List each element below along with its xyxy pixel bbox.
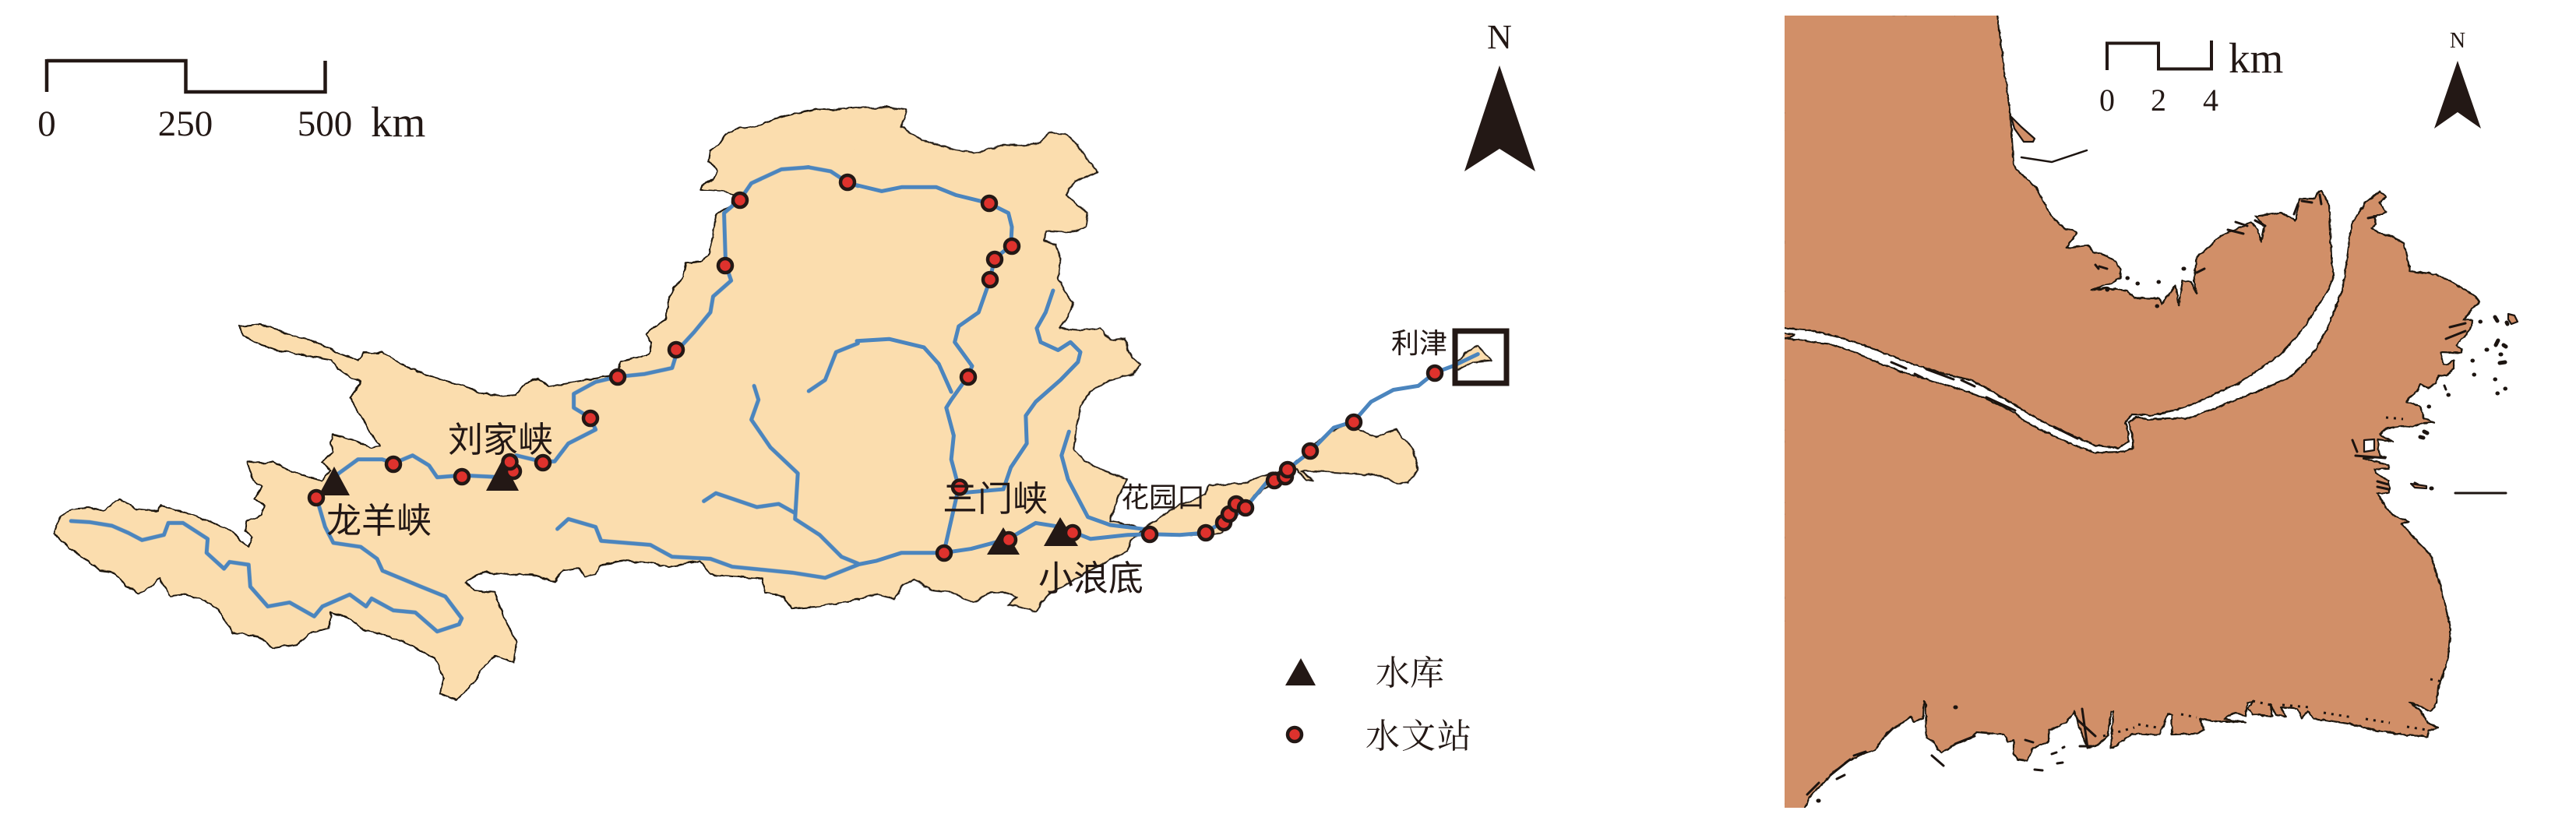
north arrow: delta map: N bbox=[2450, 29, 2465, 53]
scale bar: delta map bbox=[2099, 34, 2283, 118]
label: Longyangxia: 龙羊峡 bbox=[326, 501, 432, 541]
rivers bbox=[71, 167, 1478, 632]
scale bar: delta map: 0 bbox=[2099, 83, 2115, 118]
label: Xiaolangdi: 小浪底 bbox=[1038, 558, 1144, 598]
panel: Yellow River delta map bbox=[1783, 14, 2518, 809]
scale bar: delta map: 4 bbox=[2203, 83, 2218, 118]
label: Sanmenxia: 三门峡 bbox=[943, 479, 1048, 519]
reservoir markers bbox=[319, 460, 1078, 555]
scale bar: basin map: km bbox=[371, 98, 425, 146]
inset locator box bbox=[1455, 331, 1506, 383]
panel: Yellow River basin map bbox=[37, 18, 1535, 756]
scale bar: basin map bbox=[37, 59, 425, 146]
scale bar: delta map: 2 bbox=[2151, 83, 2166, 118]
legend bbox=[1285, 654, 1473, 756]
hydrological stations bbox=[309, 175, 1442, 560]
north arrow: basin map: N bbox=[1487, 18, 1512, 56]
label: Huayuankou: 花园口 bbox=[1121, 481, 1205, 513]
basin outline bbox=[55, 107, 1491, 699]
north arrow: basin map bbox=[1464, 18, 1535, 171]
scale bar: delta map: km bbox=[2229, 34, 2283, 82]
label: Lijin: 利津 bbox=[1391, 327, 1447, 359]
north arrow: delta map bbox=[2434, 29, 2481, 129]
legend: hydrological station: 水文站 bbox=[1366, 717, 1473, 756]
legend: hydrological station bbox=[1288, 717, 1473, 756]
scale bar: basin map: 250 bbox=[158, 104, 213, 144]
scale bar: basin map: 500 bbox=[298, 104, 352, 144]
legend: reservoir bbox=[1285, 654, 1444, 692]
label: Liujiaxia: 刘家峡 bbox=[448, 420, 553, 460]
scale bar: basin map: 0 bbox=[37, 104, 56, 144]
delta land bbox=[1783, 14, 2479, 809]
delta coastline details and islets bbox=[1807, 117, 2518, 801]
legend: reservoir: 水库 bbox=[1376, 654, 1444, 692]
